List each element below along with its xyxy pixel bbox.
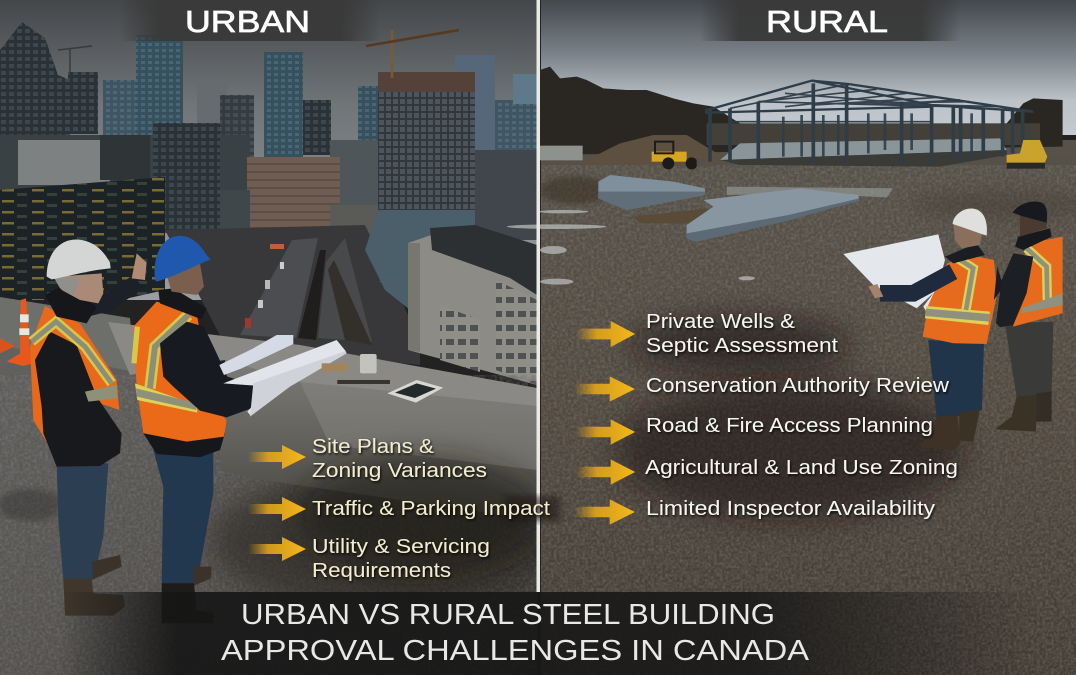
arrow: site plans — [248, 445, 306, 469]
central tower under construction with crane — [58, 30, 475, 310]
title: URBAN VS RURAL STEEL BUILDING — [241, 599, 775, 631]
panel: urban photo — [0, 0, 550, 675]
worker: white helmet — [30, 239, 147, 616]
urban list text: Utility & Servicing — [312, 535, 490, 558]
dirt piles and shed — [540, 135, 720, 167]
arrow: utility — [248, 537, 306, 561]
urban sky — [0, 0, 537, 300]
heading band: urban: URBAN — [185, 4, 310, 39]
workers in urban scene — [30, 236, 443, 623]
text shade rural — [615, 317, 965, 520]
worker: black cap — [995, 201, 1063, 432]
arrow: traffic — [248, 497, 306, 521]
panel: rural photo — [507, 0, 1076, 675]
yellow equipment — [1007, 140, 1047, 169]
water patches — [507, 187, 893, 285]
text shade urban — [295, 455, 545, 575]
arrow: agricultural — [576, 459, 635, 485]
road canyon — [165, 225, 420, 365]
rural list text: Agricultural & Land Use Zoning — [645, 456, 958, 479]
title: APPROVAL CHALLENGES IN CANADA — [221, 635, 810, 667]
urban skyline buildings — [0, 22, 537, 300]
urban list text: Traffic & Parking Impact — [312, 497, 550, 520]
urban list text — [312, 435, 550, 582]
grey office building — [408, 225, 537, 385]
rural ground — [541, 140, 1076, 675]
arrow: inspector — [574, 499, 635, 525]
center divider — [536, 0, 540, 592]
urban list text: Zoning Variances — [312, 459, 487, 482]
rural list text: Private Wells & — [646, 310, 795, 333]
rural ground texture — [540, 165, 1076, 675]
arrow: private wells — [576, 321, 635, 347]
heading band: rural: RURAL — [766, 4, 888, 39]
rural list text: Limited Inspector Availability — [646, 497, 936, 520]
worker: blue helmet — [133, 236, 270, 623]
shade behind traffic text across divider — [505, 496, 560, 522]
rural list text: Septic Assessment — [646, 334, 838, 357]
rooftop ground — [0, 340, 537, 675]
rural list text: Road & Fire Access Planning — [646, 414, 933, 437]
urban list text: Requirements — [312, 559, 451, 582]
treeline — [540, 67, 1063, 155]
traffic cone — [0, 298, 40, 366]
rolled blueprints — [219, 335, 347, 417]
worker: white helmet with blueprint — [843, 208, 1003, 450]
rural sky — [541, 0, 1076, 135]
heading band: rural — [700, 0, 960, 41]
arrow: road access — [576, 419, 635, 445]
coffee mug and tablet on ledge — [322, 354, 443, 403]
heading band: urban — [120, 0, 380, 41]
left parapet — [0, 297, 135, 372]
rural list text — [645, 310, 958, 520]
title — [60, 592, 1040, 675]
ground texture — [0, 375, 550, 675]
steel building frame — [705, 81, 1033, 167]
urban list text: Site Plans & — [312, 435, 434, 458]
rural list text: Conservation Authority Review — [646, 374, 949, 397]
yellow loader — [652, 142, 706, 169]
arrow: conservation — [574, 376, 635, 402]
concrete parapet wall — [108, 322, 537, 520]
steel beam stacks — [598, 175, 859, 242]
